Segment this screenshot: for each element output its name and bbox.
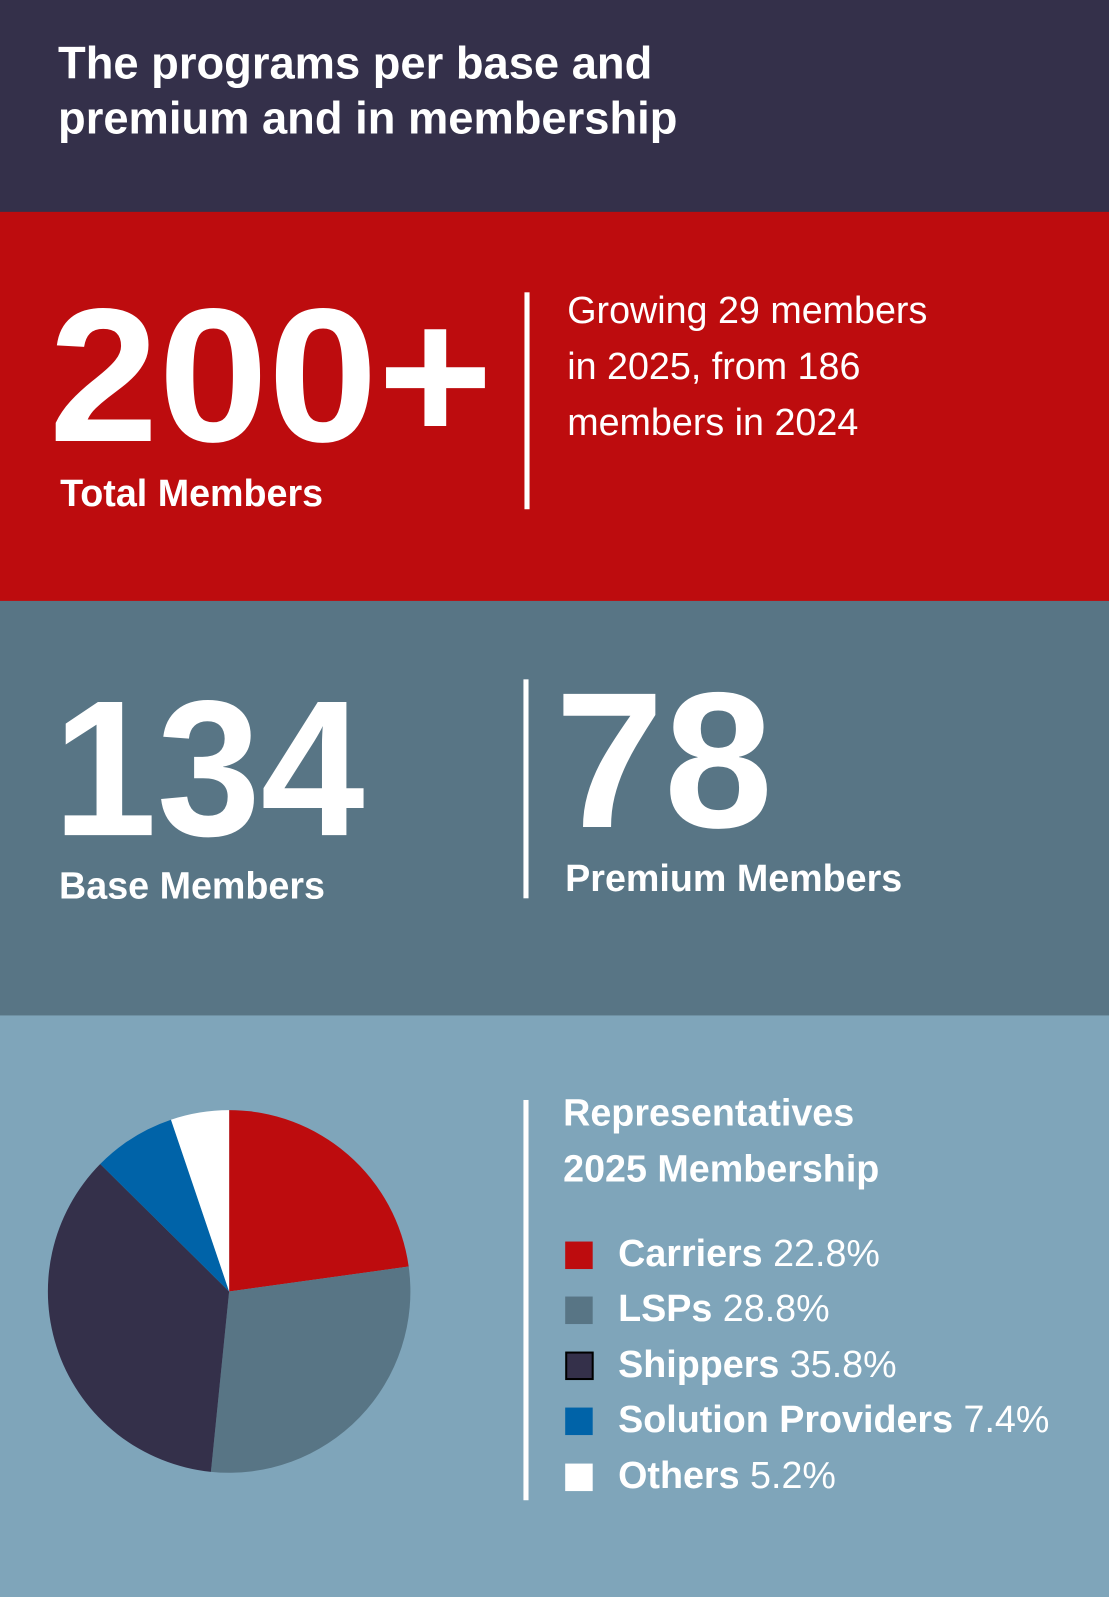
legend: LSPs 28.8% (618, 1287, 830, 1329)
legend (565, 1232, 1049, 1496)
legend: Others 5.2% (618, 1454, 836, 1496)
number: base members: 134 (53, 661, 365, 877)
panel: header (0, 0, 1109, 213)
legend: Carriers 22.8% (618, 1232, 880, 1274)
panel: total members (0, 212, 1109, 602)
title (58, 37, 677, 143)
legend heading: 2025 Membership (563, 1147, 879, 1189)
legend: Solution Providers 7.4% (618, 1398, 1049, 1440)
text: growth: members in 2024 (567, 401, 858, 443)
legend heading (563, 1091, 879, 1189)
legend heading: Representatives (563, 1091, 854, 1133)
text: growth (567, 289, 927, 443)
legend: Shippers 35.8% (618, 1343, 897, 1385)
number: premium members (555, 653, 902, 899)
panel: representatives (0, 1015, 1109, 1597)
big number 200+: 200+ (49, 270, 493, 482)
pie chart (48, 1110, 410, 1473)
panel: base and premium (0, 601, 1109, 1016)
title: premium and in membership (58, 92, 677, 143)
number: premium members: 78 (555, 653, 773, 869)
text: growth: in 2025, from 186 (567, 345, 860, 387)
text: growth: Growing 29 members (567, 289, 927, 331)
title: The programs per base and (58, 37, 652, 88)
label: total members: Total Members (60, 472, 323, 514)
number: base members: Base Members (59, 864, 325, 906)
number: premium members: Premium Members (565, 857, 902, 899)
